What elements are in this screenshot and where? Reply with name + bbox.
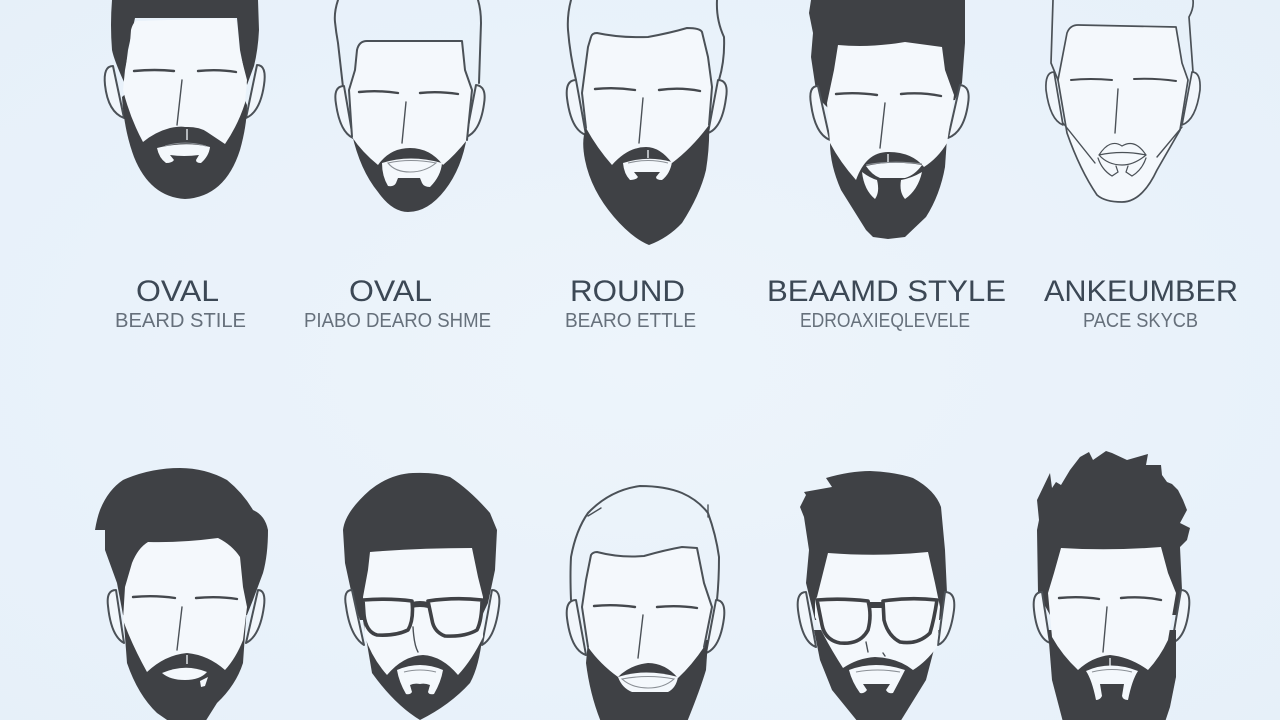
label: oval: BEARD STILE — [115, 310, 246, 332]
label: ankeumber — [1044, 275, 1238, 332]
label: beard style: EDROAXIEQLEVELE — [800, 310, 970, 332]
label: ankeumber: ANKEUMBER — [1044, 275, 1238, 308]
label: oval second — [304, 275, 491, 332]
label: beard style: BEAAMD STYLE — [767, 275, 1006, 308]
face: round outlined hair long beard — [567, 0, 727, 245]
label: oval second: PIABO DEARO SHME — [304, 310, 491, 332]
label: round: BEARO ETTLE — [565, 310, 696, 332]
label: oval second: OVAL — [349, 275, 432, 308]
label: beard style — [767, 275, 1006, 332]
face: dark hair with glasses — [343, 473, 499, 720]
face: fully outlined thin jaw — [1046, 0, 1200, 202]
face: outlined bald short hair — [567, 486, 724, 720]
face: dark quiff and pointed beard — [809, 0, 969, 239]
label: round — [565, 275, 696, 332]
face: oval dark hair full beard — [105, 0, 265, 199]
label: oval: OVAL — [136, 275, 219, 308]
face: swept spiky hair with large glasses — [798, 471, 954, 720]
label: ankeumber: PACE SKYCB — [1083, 310, 1198, 332]
label: round: ROUND — [570, 275, 685, 308]
label: oval — [115, 275, 246, 332]
face: tall spiky hair and long beard — [1034, 451, 1190, 720]
face: oval outlined hair short beard — [335, 0, 485, 212]
face: swept dark hair full beard — [95, 468, 268, 720]
